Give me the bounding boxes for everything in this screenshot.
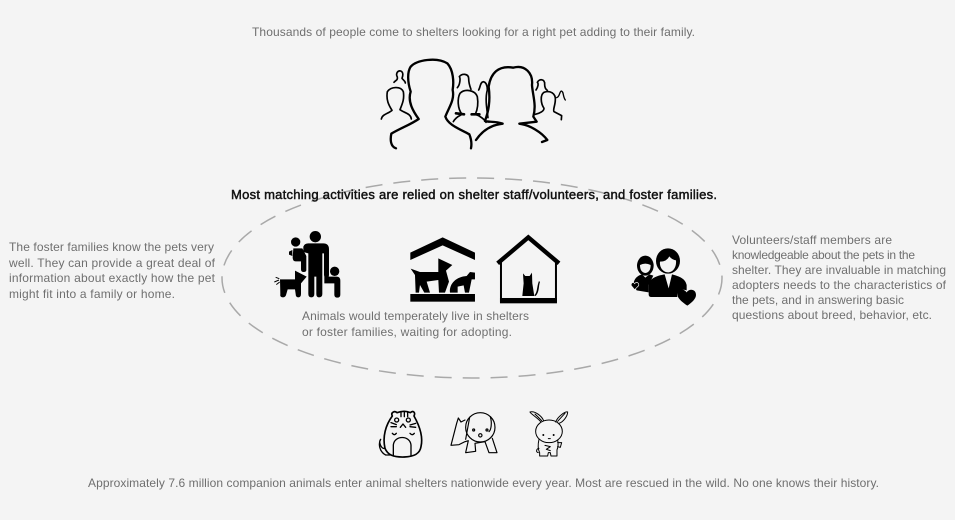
bottom caption: Approximately 7.6 million companion animals enter animal shelters nationwide every year. Most are rescued in the wild. No one knows their history. <box>88 476 879 490</box>
caption: animals live in shelters <box>302 309 529 339</box>
text block: volunteers: shelter. They are invaluable in matching <box>732 263 946 277</box>
text block: volunteers: the pets, and in answering basic <box>732 293 904 307</box>
text block: volunteers: adopters needs to the characteristics of <box>732 278 947 292</box>
caption: animals live in shelters: or foster families, waiting for adopting. <box>302 325 512 339</box>
text block: foster families: might fit into a family or home. <box>9 287 175 301</box>
caption: animals live in shelters: Animals would temperately live in shelters <box>302 309 529 323</box>
text block: volunteers: Volunteers/staff members are <box>732 233 892 247</box>
text block: foster families: The foster families know the pets very <box>9 240 214 254</box>
text block: volunteers <box>732 233 947 322</box>
icon: crowd of people outlines <box>381 60 565 148</box>
text block: volunteers: knowledgeable about the pets in the <box>732 248 915 262</box>
icon: rabbit outline <box>530 412 568 456</box>
icon: volunteers with hearts <box>631 248 696 306</box>
icon: foster family with dog <box>274 231 340 298</box>
heading: Most matching activities are relied on shelter staff/volunteers, and foster families. <box>231 187 717 202</box>
text block: foster families <box>8 240 216 301</box>
icon: house with cat <box>498 237 559 303</box>
top caption: Thousands of people come to shelters looking for a right pet adding to their family. <box>252 25 695 39</box>
text block: volunteers: questions about breed, behavior, etc. <box>732 308 932 322</box>
icon: cat outline <box>379 411 422 457</box>
text block: foster families: well. They can provide a great deal of <box>8 256 216 270</box>
icon: shelter with dog and cat <box>410 237 475 302</box>
icon: dog outline <box>451 413 497 453</box>
dashed ellipse <box>222 178 722 378</box>
text block: foster families: information about exactly how the pet <box>9 271 216 285</box>
